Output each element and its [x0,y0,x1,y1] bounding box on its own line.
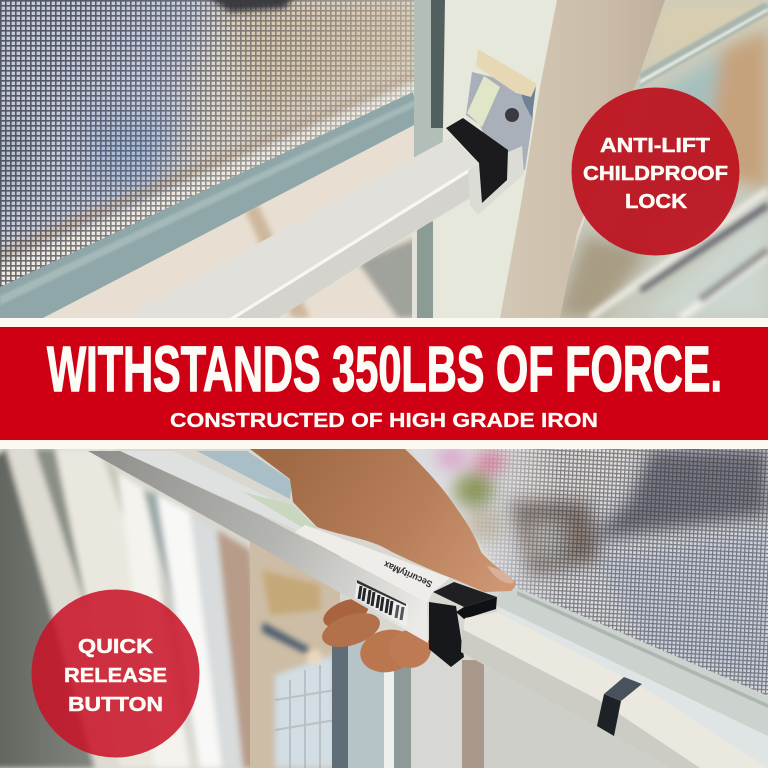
screen mesh view [410,448,768,699]
rail behind bar [497,585,768,736]
blurred garden view [250,540,340,768]
screen mesh [0,0,420,295]
pale rail and blue glass behind hand [120,451,316,537]
lower window mullions [332,635,674,768]
callout text [64,635,167,716]
white clip [468,146,524,215]
red circle [572,88,740,256]
brand label upside-down: SecurityMax [382,558,434,589]
white bar right section [461,612,768,768]
photo: window lock latch [0,0,768,318]
subheadline: CONSTRUCTED OF HIGH GRADE IRON [170,410,598,432]
vertical window frame [412,0,446,318]
callout text: RELEASE [64,664,167,687]
white bar left section [88,451,450,643]
clip housing [429,602,464,667]
hand [250,449,516,592]
callout text: LOCK [625,190,687,213]
pale door jamb [440,0,560,318]
beige diagonal post [500,0,665,318]
red band [0,327,768,440]
callout: quick release button [32,590,200,758]
callout text: CHILDPROOF [583,162,728,185]
glass band between rail and bar [497,606,768,768]
white pull bar [123,137,480,318]
black release button [429,582,497,667]
thumb nail [487,566,514,583]
screen frame rail [0,92,420,318]
callout text: BUTTON [68,693,163,716]
white band [0,318,768,449]
lower glass pane [244,205,412,318]
small black clip [597,677,642,736]
callout text [583,134,728,213]
room backdrop [0,449,768,768]
glass backdrop [44,94,585,318]
barcode sticker [355,580,408,627]
banner [0,318,768,449]
photo: hand pressing release button [0,448,768,768]
brass tab [476,49,537,97]
bracket screw hole [505,108,519,122]
metal bracket [466,72,536,175]
fingers under bar [322,599,431,672]
blurred window frames at left [0,449,270,768]
callout text: ANTI-LIFT [600,134,711,157]
callout: anti-lift childproof lock [572,88,740,256]
red circle [32,590,200,758]
black rubber block [446,118,508,203]
chrome spring [467,76,500,127]
callout text: QUICK [78,635,153,658]
blurred view at right [555,0,768,318]
